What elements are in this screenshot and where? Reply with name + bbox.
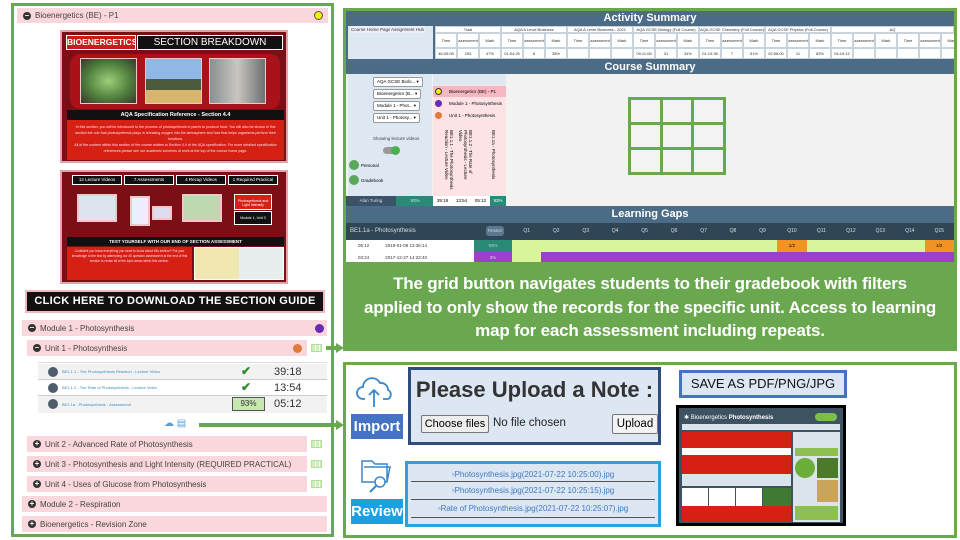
table: activity summary: AQA A Level Business: [514, 26, 554, 32]
panel: gradebook: Mark: [552, 38, 560, 42]
row: Module 2: +: [30, 499, 34, 508]
form: upload a note: Upload: [617, 418, 653, 430]
filters column: 93%: [410, 198, 420, 203]
list: unit 1 items: 39:18: [274, 366, 302, 378]
list: unit 1 items: 13:54: [274, 382, 302, 394]
poster: resources overview: 7 Assessments: [134, 177, 164, 182]
panel: gradebook: 01:15:38: [702, 50, 718, 56]
label: save as: [679, 370, 847, 398]
row: Unit 4: +: [35, 479, 39, 488]
panel: gradebook: Mark: [750, 38, 758, 42]
arrow: grid to gradebook: [326, 343, 343, 353]
panel: gradebook: Mark: [486, 38, 494, 42]
list: uploaded notes: ▫Photosynthesis.jpg(2021-07-22 10:25:00).jpg: [452, 470, 614, 479]
icon: grid unit 1: [311, 344, 322, 352]
table: activity summary: AQA A Level Business - 2021: [574, 26, 626, 32]
panel: gradebook: Mark: [882, 38, 890, 42]
row: Module 1: Module 1 - Photosynthesis: [40, 324, 134, 332]
poster: resources overview: 12 Lecture Videos: [79, 177, 115, 182]
table: activity summary: AQA GCSE Biology (Full Course): [636, 26, 696, 32]
table: learning gaps: Q15: [935, 228, 944, 234]
filters column: Gradebook: [361, 178, 383, 183]
row: Module 1: –: [30, 323, 34, 332]
poster: section breakdown: In this section, you will be introduced to the process of photosynthesis in plants to produce food. You will also be shown in this section the role that photosynthesis plays in releasing oxygen into the atmosphere and how that helps organisms perform their functions.: [75, 125, 276, 141]
row: Unit 4: [27, 476, 307, 492]
course hierarchy: Module 1 - Photosynthesis: [449, 101, 502, 106]
panel: gradebook: Time: [838, 38, 846, 42]
callout: gradebook description: applied to only show the records for the specific unit. Access to learning: [364, 298, 936, 316]
panel: gradebook: [343, 8, 957, 265]
course hierarchy: Unit 1 - Photosynthesis: [449, 113, 495, 118]
table: learning gaps: Q5: [641, 228, 648, 234]
form: upload a note: [408, 367, 661, 445]
heading: Bioenergetics (BE) - P1: [17, 8, 328, 23]
course hierarchy: 39:18: [437, 198, 448, 203]
table: activity summary: Assignment Hub: [391, 27, 424, 32]
list: unit 1 items: BE1.1a - Photosynthesis - Assessment: [62, 402, 131, 407]
table: learning gaps: Q12: [846, 228, 856, 234]
table: learning gaps: Q8: [730, 228, 736, 234]
row: Revision zone: +: [30, 519, 34, 528]
filters column: Bioenergetics (B... ▾: [377, 91, 417, 96]
table: activity summary: [346, 25, 954, 60]
table: learning gaps: Q2: [553, 228, 560, 234]
heading: Activity Summary: [346, 11, 954, 25]
panel: notes upload: [343, 362, 957, 538]
panel: gradebook: 04:19:12: [834, 50, 850, 56]
image: note preview: ✱ Bioenergetics Photosynthesis: [684, 415, 773, 421]
panel: gradebook: 51%: [750, 50, 758, 56]
table: activity summary: Course Home Page: [351, 27, 391, 32]
table: learning gaps: Q3: [582, 228, 589, 234]
heading: Learning Gaps: [346, 206, 954, 223]
table: learning gaps: BE1.1a - Photosynthesis: [350, 228, 416, 234]
filters column: [348, 74, 432, 206]
panel: gradebook: 02:58:00: [768, 50, 784, 56]
row: Module 2: Module 2 - Respiration: [40, 500, 120, 508]
table: learning gaps: 3%: [490, 255, 496, 260]
course hierarchy: BE1.1.2 - The Rate of Photosynthesis - Lecture Video: [458, 130, 473, 180]
table: learning gaps: Q14: [905, 228, 915, 234]
panel: gradebook: 47%: [486, 50, 494, 56]
table: activity summary: AQ: [890, 26, 895, 32]
poster: resources overview: Confident you know everything you need to know about this section? Put your knowledge to the test by attempting our 40 question assessment at the end of this section to revise all of the topic areas within this section.: [72, 249, 187, 263]
heading: Course Summary: Course Summary: [604, 61, 696, 73]
table: learning gaps: Q7: [700, 228, 707, 234]
table: learning gaps: Q1: [523, 228, 530, 234]
poster: section breakdown: All of the content within this section of the course relates to Section 4.4 of the AQA specification. For more detailed specification references please see our academic schemes of work at the top of the course home page.: [74, 143, 277, 153]
icon: gradebook grid: [628, 97, 726, 175]
panel: gradebook: Mark: [618, 38, 626, 42]
panel: gradebook: 253: [465, 50, 471, 56]
filters column: Alan Turing: [360, 198, 382, 203]
table: activity summary: Total: [464, 26, 472, 32]
row: Revision zone: Bioenergetics - Revision Zone: [40, 520, 147, 528]
panel: gradebook: Time: [442, 38, 450, 42]
list: unit 1 items: ✔: [241, 364, 251, 378]
panel: gradebook: Time: [904, 38, 912, 42]
poster: resources overview: Photosynthesis and Light Intensity: [238, 199, 268, 207]
table: learning gaps: Q11: [817, 228, 826, 234]
form: upload a note: Choose files: [425, 418, 485, 430]
panel: gradebook: 7: [731, 50, 733, 56]
button: download section guide: CLICK HERE TO DOWNLOAD THE SECTION GUIDE: [34, 295, 316, 307]
icon: cloud upload: [356, 377, 392, 407]
row: Module 2: [22, 496, 327, 512]
filters column: AQA GCSE Biolo... ▾: [377, 79, 419, 84]
row: Unit 2: [27, 436, 307, 452]
panel: gradebook: Time: [640, 38, 648, 42]
filters column: Unit 1 - Photosy... ▾: [377, 115, 416, 120]
table: learning gaps: Q13: [876, 228, 885, 234]
list: unit 1 items: 05:12: [274, 398, 302, 410]
table: learning gaps: Retake: [488, 228, 502, 233]
poster: section breakdown: SECTION BREAKDOWN: [154, 37, 266, 48]
panel: gradebook: 34%: [684, 50, 692, 56]
panel: gradebook: Time: [706, 38, 714, 42]
filters column: Personal: [361, 163, 379, 168]
table: learning gaps: 1/2: [789, 243, 795, 248]
course hierarchy: 93%: [493, 198, 502, 203]
heading: Bioenergetics (BE) - P1: –: [25, 10, 29, 20]
table: learning gaps: Q4: [612, 228, 618, 234]
row: Module 1: [22, 320, 327, 336]
list: uploaded notes: ▫Rate of Photosynthesis.jpg(2021-07-22 10:25:07).jpg: [438, 504, 628, 513]
row: Unit 4: Unit 4 - Uses of Glucose from Photosynthesis: [45, 480, 206, 488]
row: Unit 3: [27, 456, 307, 472]
form: upload a note: No file chosen: [493, 417, 566, 429]
panel: gradebook: 09:11:08: [636, 50, 652, 56]
panel: gradebook: Mark: [684, 38, 692, 42]
arrow: notes to upload panel: [199, 420, 343, 430]
callout: gradebook description: map for each assessment including repeats.: [475, 321, 825, 340]
row: Revision zone: [22, 516, 327, 532]
callout: gradebook description: The grid button navigates students to their gradebook with filters: [393, 274, 907, 293]
callout: gradebook description: [343, 265, 957, 351]
panel: gradebook: 11: [796, 50, 800, 56]
panel: gradebook: Time: [772, 38, 780, 42]
panel: course page (left): [11, 3, 334, 537]
panel: gradebook: Time: [508, 38, 516, 42]
poster: resources overview: TEST YOURSELF WITH OUR END OF SECTION ASSESSMENT: [109, 239, 242, 244]
row: Unit 2: +: [35, 439, 39, 448]
heading: Activity Summary: Activity Summary: [604, 12, 696, 24]
panel: gradebook: Time: [574, 38, 582, 42]
list: unit 1 items: BE1.1.1 - The Photosynthesis Reaction - Lecture Video: [62, 369, 160, 374]
row: Unit 2: Unit 2 - Advanced Rate of Photosynthesis: [45, 440, 193, 448]
label: save as: SAVE AS PDF/PNG/JPG: [691, 376, 835, 391]
panel: gradebook: 31: [664, 50, 668, 56]
course hierarchy: 05:12: [475, 198, 486, 203]
row: Unit 1: [27, 340, 307, 356]
table: learning gaps: Q10: [787, 228, 797, 234]
panel: gradebook: 83%: [816, 50, 824, 56]
panel: gradebook: 01:54:25: [504, 50, 520, 56]
icons: upload and notes: ☁︎ ▤: [164, 418, 186, 429]
table: learning gaps: Q6: [671, 228, 677, 234]
image: note preview: [676, 405, 846, 526]
filters column: Module 1 - Phot... ▾: [377, 103, 416, 108]
table: activity summary: AQA GCSE Chemistry (Full Course): [700, 26, 764, 32]
table: learning gaps: [346, 223, 954, 265]
label: Review: Review: [351, 503, 403, 520]
list: unit 1 items: ✔: [241, 380, 251, 394]
panel: gradebook: 38%: [552, 50, 560, 56]
table: learning gaps: 1/2: [936, 243, 942, 248]
list: uploaded notes: ▫Photosynthesis.jpg(2021-07-22 10:25:15).jpg: [452, 486, 614, 495]
label: Import: Import: [354, 418, 400, 435]
row: Unit 3: Unit 3 - Photosynthesis and Light Intensity (REQUIRED PRACTICAL): [45, 460, 291, 468]
poster: resources overview: 4 Recap Videos: [185, 177, 217, 182]
table: learning gaps: 05:12 2019-01-08 13:36:14: [358, 243, 427, 248]
filters column: Showing lecture videos: [373, 136, 419, 141]
list: uploaded notes: [405, 461, 661, 527]
label: Import: [351, 414, 403, 439]
form: upload a note: Please Upload a Note :: [416, 377, 653, 402]
list: unit 1 items: BE1.1.2 - The Rate of Photosynthesis - Lecture Video: [62, 385, 157, 390]
course hierarchy: Bioenergetics (BE) - P1: [449, 89, 496, 94]
label: Review: [351, 499, 403, 524]
course hierarchy: [433, 74, 506, 206]
heading: Course Summary: [346, 60, 954, 74]
row: Unit 3: +: [35, 459, 39, 468]
panel: gradebook: 8: [533, 50, 535, 56]
row: Unit 1: Unit 1 - Photosynthesis: [45, 344, 127, 352]
table: learning gaps: Q9: [759, 228, 766, 234]
poster: resources overview: Module 1, Unit 3: [240, 216, 266, 220]
poster: section breakdown: [60, 30, 288, 163]
course hierarchy: BE1.1a - Photosynthesis: [491, 130, 496, 179]
poster: resources overview: 1 Required Practical: [233, 177, 273, 182]
heading: Bioenergetics (BE) - P1: Bioenergetics (BE) - P1: [35, 11, 119, 20]
heading: Learning Gaps: Learning Gaps: [611, 208, 689, 220]
button: download section guide: [25, 290, 325, 313]
poster: section breakdown: AQA Specification Reference - Section 4.4: [121, 112, 230, 118]
list: unit 1 items: [38, 362, 327, 412]
table: learning gaps: 03:24 2017-12-27 14:22:40: [358, 255, 427, 260]
course hierarchy: BE1.1.1 - The Photosynthesis Reaction - Lecture Video: [444, 130, 454, 189]
list: unit 1 items: 93%: [240, 399, 256, 408]
panel: gradebook: Mark: [816, 38, 824, 42]
row: Unit 1: –: [35, 343, 39, 352]
table: learning gaps: 93%: [488, 243, 498, 248]
poster: section breakdown: BIOENERGETICS: [67, 37, 136, 47]
course hierarchy: 13:54: [456, 198, 467, 203]
icon: folder search: [361, 460, 391, 493]
poster: resources overview: [60, 170, 288, 284]
table: activity summary: AQA GCSE Physics (Full Course): [768, 26, 828, 32]
panel: gradebook: 46:05:08: [438, 50, 454, 56]
